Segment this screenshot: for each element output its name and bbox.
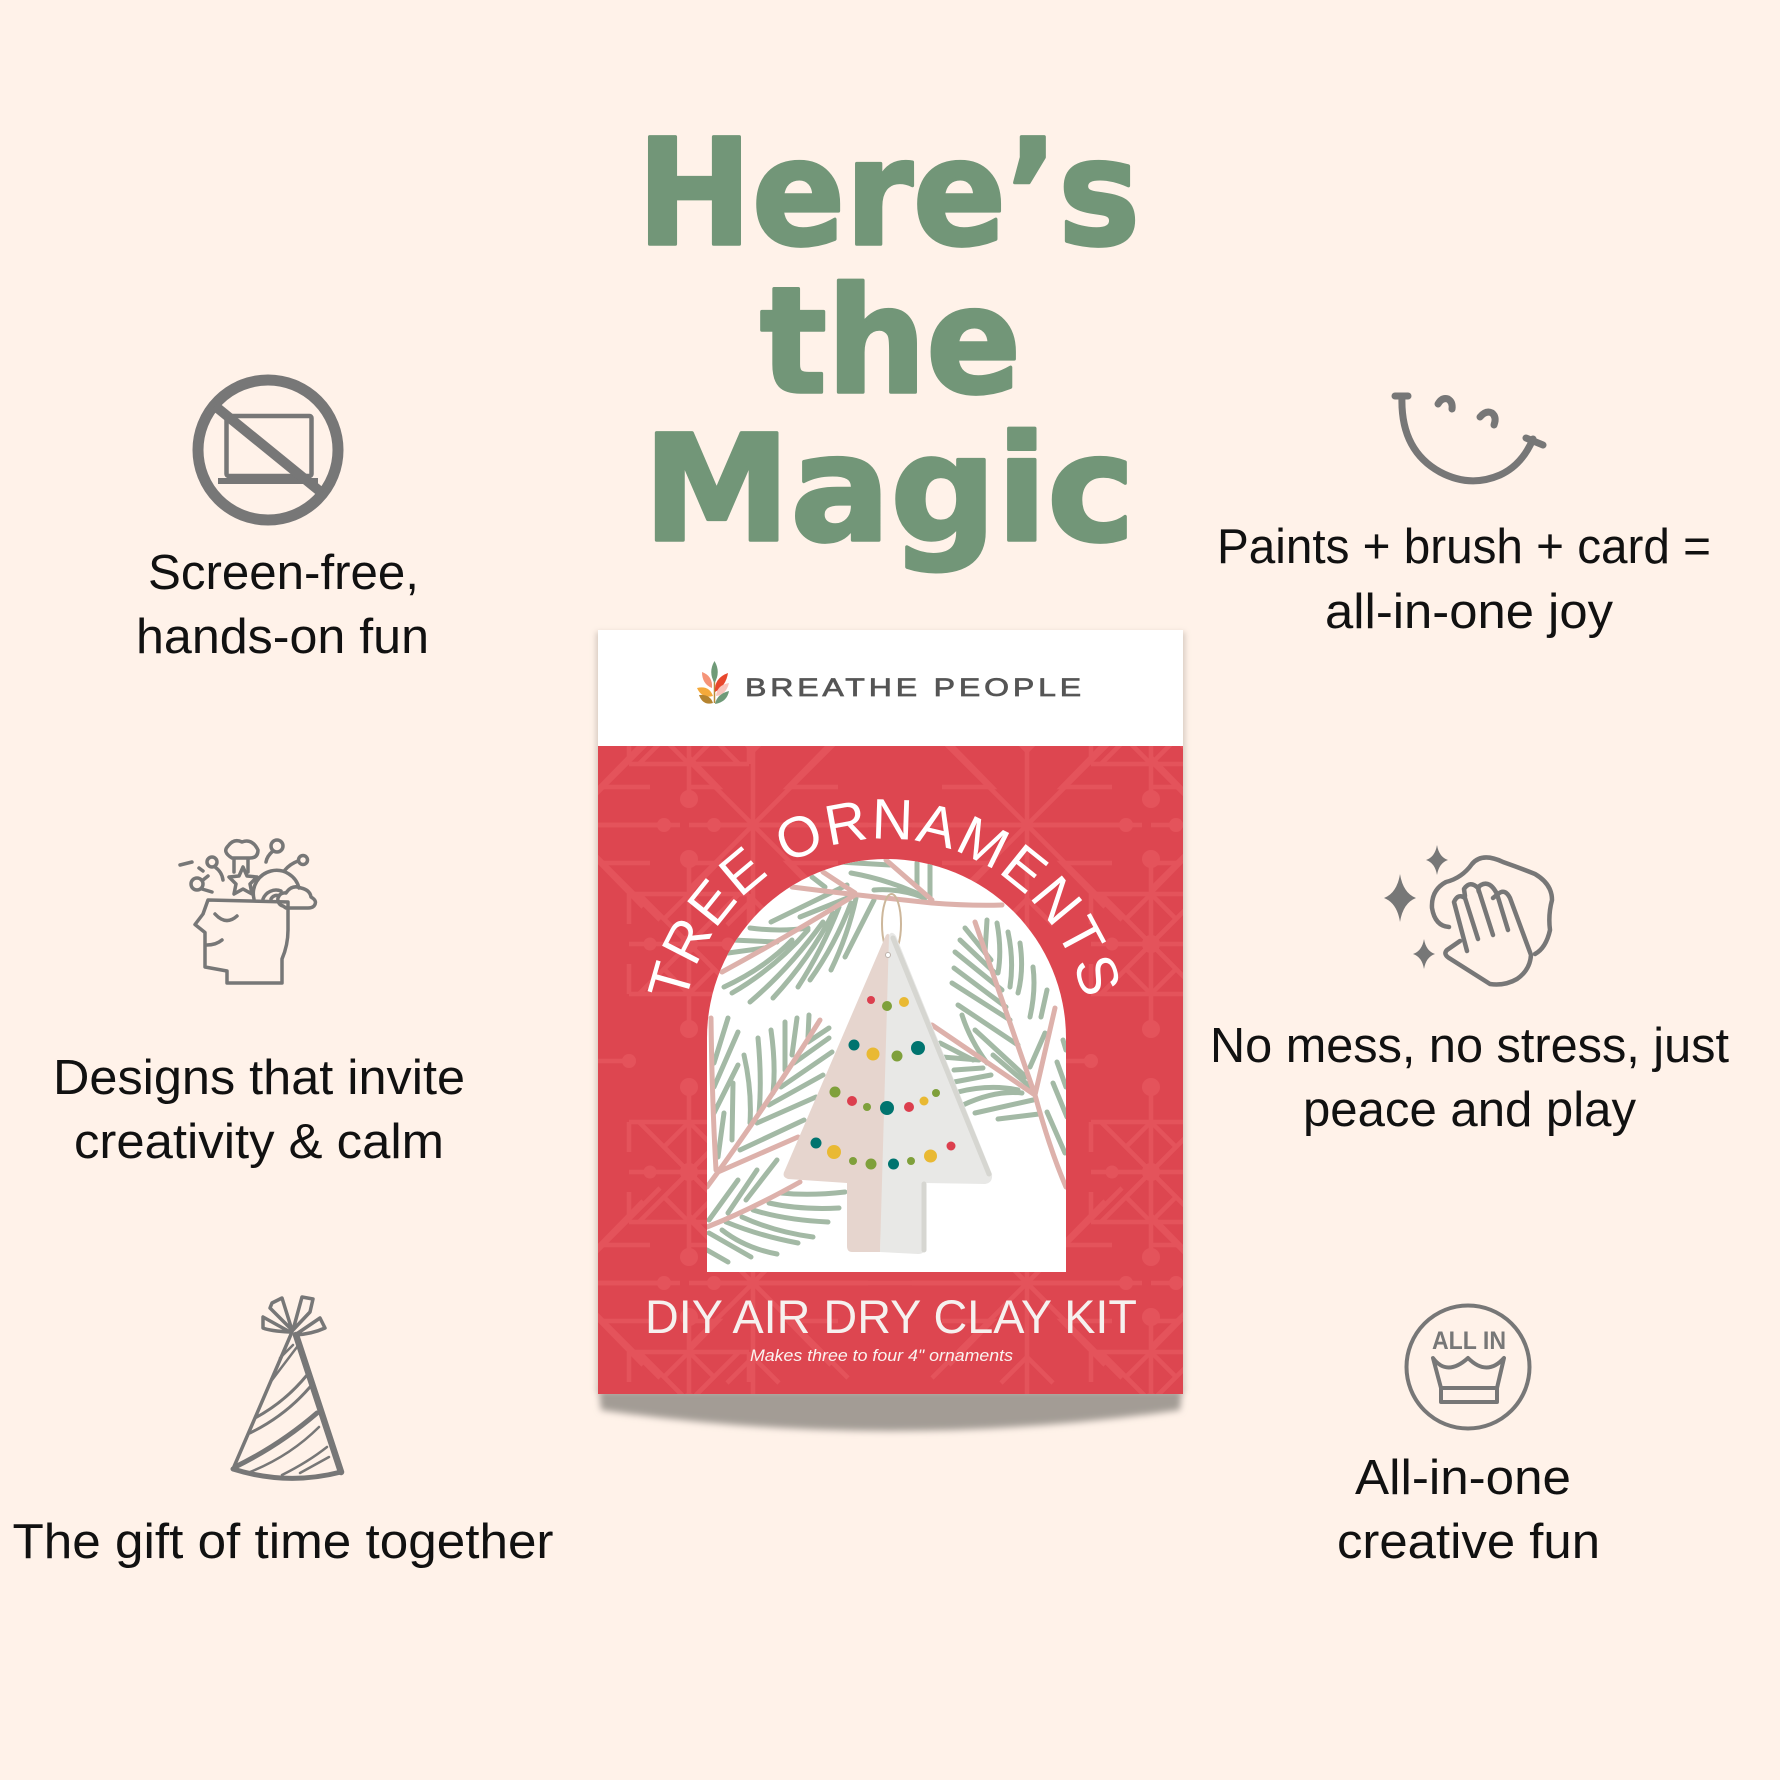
tree right edge [893, 938, 989, 1250]
text: screen-free [136, 546, 429, 664]
text: no mess: No mess, no stress, just [1210, 1019, 1729, 1073]
text: paints brush card: Paints + brush + card = [1217, 520, 1711, 574]
pine branches [707, 860, 1067, 1262]
icon: hand wiping with sparkles [1384, 845, 1552, 984]
feature: all-in-one creative fun [1337, 1306, 1600, 1569]
text: creative fun: All-in-one [1355, 1451, 1571, 1505]
text: no mess [1210, 1019, 1729, 1137]
feature: creativity [53, 840, 465, 1169]
feature: time together [12, 1297, 554, 1569]
feature: screen-free [136, 380, 429, 664]
icon: smile [1395, 396, 1543, 481]
text: creative fun [1337, 1451, 1600, 1569]
tree right half [880, 933, 992, 1254]
title [637, 108, 1140, 575]
title: the [760, 256, 1021, 427]
logo: leaf mark [697, 661, 729, 704]
package header [598, 630, 1183, 746]
ornament hole [886, 952, 890, 958]
logo: brand name: BREATHE PEOPLE [745, 674, 1085, 702]
kit subtitle: Makes three to four 4" ornaments [750, 1346, 1014, 1365]
text: creativity [53, 1051, 465, 1169]
text: no mess: peace and play [1303, 1083, 1636, 1137]
curved title: tree ornaments: TREE ORNAMENTS [648, 799, 1118, 994]
package shadow [596, 632, 1185, 1431]
text: creativity: creativity & calm [74, 1115, 444, 1169]
text: screen-free: Screen-free, [148, 546, 419, 600]
text: creative fun: creative fun [1337, 1515, 1600, 1569]
icon: crossed-out laptop [198, 380, 338, 520]
icon: head with ideas [180, 840, 315, 983]
ornament: clay tree [784, 894, 992, 1254]
product: clay kit package [594, 630, 1188, 1436]
tree left half [784, 934, 889, 1252]
icon: all in crown badge: ALL IN [1432, 1327, 1506, 1355]
arch window [707, 859, 1066, 1272]
feature: no mess [1210, 845, 1729, 1137]
text: paints brush card: all-in-one joy [1325, 585, 1614, 639]
kit name: DIY AIR DRY CLAY KIT [645, 1290, 1137, 1343]
title: Here’s [637, 108, 1140, 279]
garland dots [810, 996, 956, 1170]
text: creativity: Designs that invite [53, 1051, 465, 1105]
package red panel [598, 746, 1183, 1394]
hanging string [882, 894, 901, 954]
feature: all-in-one joy [1217, 396, 1711, 639]
text: gift of time: The gift of time together [12, 1515, 554, 1569]
icon: party hat [233, 1297, 341, 1478]
text: screen-free: hands-on fun [136, 610, 429, 664]
text: paints brush card [1217, 520, 1711, 639]
title: Magic [643, 404, 1135, 575]
icon: all in crown badge [1406, 1306, 1530, 1428]
